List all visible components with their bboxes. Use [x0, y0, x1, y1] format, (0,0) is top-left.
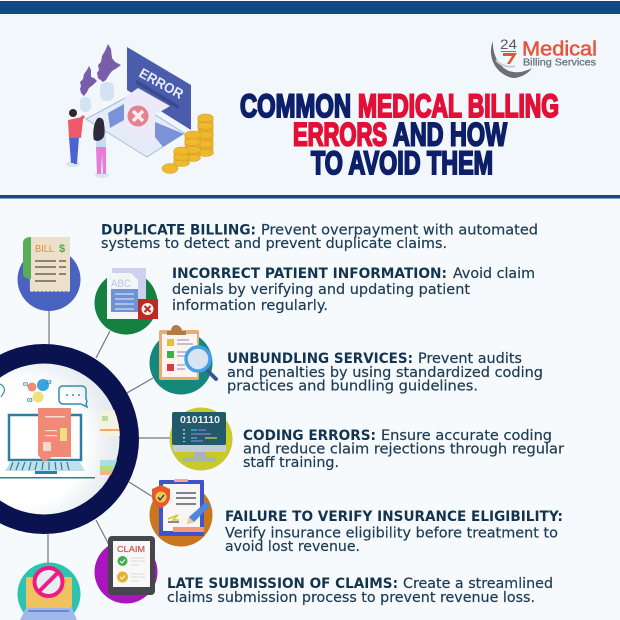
logo: 24/7 Medical Billing Services: [491, 36, 597, 78]
laptop: ERROR: [137, 65, 186, 102]
icon: claim tablet: [94, 536, 158, 604]
text: coding errors: Ensure accurate coding: [381, 428, 552, 444]
hub: pie chart bubbles: 01: [23, 382, 29, 388]
icon: clipboard with magnifier: [150, 325, 216, 394]
title: AND HOW: [393, 116, 508, 152]
text: incorrect patient information: [172, 266, 535, 314]
icon: document with error: [94, 268, 158, 334]
title: [240, 88, 559, 181]
logo: 24/7 Medical Billing Services: Billing Services: [523, 58, 596, 68]
item: duplicate billing: [18, 222, 538, 311]
plants: [80, 44, 121, 112]
text: duplicate billing: DUPLICATE BILLING:: [101, 222, 256, 238]
hub: side panels: [100, 410, 120, 475]
text: duplicate billing: [101, 222, 538, 252]
text: incorrect patient information: denials by verifying and updating patient: [172, 282, 471, 298]
text: late submission of claims: Create a streamlined: [403, 576, 553, 592]
connector lines: [48, 311, 171, 563]
person left: [66, 109, 85, 167]
illustration: error laptop with people and coins: [66, 44, 214, 178]
header band: [0, 0, 620, 198]
text: unbundling services: [227, 351, 543, 394]
text: unbundling services: UNBUNDLING SERVICES:: [227, 351, 413, 367]
text: late submission of claims: LATE SUBMISSION OF CLAIMS:: [167, 576, 398, 592]
text: incorrect patient information: INCORRECT PATIENT INFORMATION:: [172, 266, 447, 282]
hub: pie chart bubbles: 03: [27, 398, 33, 404]
text: incorrect patient information: Avoid claim: [453, 266, 535, 282]
text: coding errors: [243, 428, 564, 471]
logo: 24/7 Medical Billing Services: 24: [500, 36, 517, 52]
item: late submission of claims: [94, 536, 553, 606]
icon: monitor with code: [170, 408, 232, 470]
logo: 24/7 Medical Billing Services: Medical: [522, 38, 597, 60]
icon: bill: [18, 237, 80, 311]
item: coding errors: [170, 408, 564, 471]
hub: laptop and document: [0, 408, 95, 478]
text: failure to verify insurance eligibility: FAILURE TO VERIFY INSURANCE ELIGIBILITY:: [225, 509, 563, 525]
item: blocked laptop icon: [18, 562, 80, 620]
hub: bug icon fragment: [0, 384, 4, 397]
item: failure to verify insurance eligibility: [150, 479, 563, 555]
text: unbundling services: and penalties by using standardized coding: [227, 365, 543, 381]
title: COMMON: [240, 88, 351, 124]
text: coding errors: and reduce claim rejections through regular: [243, 442, 564, 458]
icon: monitor with code: 0101110: [180, 415, 220, 426]
item: incorrect patient information: [94, 266, 535, 334]
text: incorrect patient information: information regularly.: [172, 298, 328, 314]
title: ERRORS: [293, 116, 387, 152]
icon: document with error: ABC: [111, 278, 131, 290]
text: late submission of claims: [167, 576, 553, 606]
person right: [93, 118, 109, 178]
text: duplicate billing: systems to detect and prevent duplicate claims.: [101, 236, 447, 252]
coins: [162, 114, 214, 174]
text: unbundling services: Prevent audits: [418, 351, 522, 367]
text: failure to verify insurance eligibility: Verify insurance eligibility before treatment to: [225, 526, 558, 542]
hub: pie chart bubbles: [23, 379, 52, 404]
hub circle with laptop illustration: [0, 354, 129, 524]
item: unbundling services: [150, 325, 543, 394]
text: failure to verify insurance eligibility: [225, 509, 563, 555]
text: coding errors: staff training.: [243, 455, 339, 471]
hub: speech bubble: [59, 386, 87, 407]
text: unbundling services: practices and bundling guidelines.: [227, 378, 478, 394]
icon: insurance form with shield and pen: [150, 479, 212, 546]
hub: pie chart bubbles: 03: [46, 380, 52, 386]
title: TO AVOID THEM: [311, 145, 493, 181]
text: coding errors: CODING ERRORS:: [243, 428, 376, 444]
text: late submission of claims: claims submission process to prevent revenue loss.: [167, 590, 535, 606]
text: duplicate billing: Prevent overpayment with automated: [261, 222, 538, 238]
icon: bill: $: [59, 243, 65, 255]
icon: bill: BILL: [35, 243, 54, 255]
laptop: [86, 47, 191, 157]
error document: [124, 88, 170, 146]
icon: claim tablet: CLAIM: [117, 544, 145, 554]
text: failure to verify insurance eligibility: avoid lost revenue.: [225, 539, 360, 555]
